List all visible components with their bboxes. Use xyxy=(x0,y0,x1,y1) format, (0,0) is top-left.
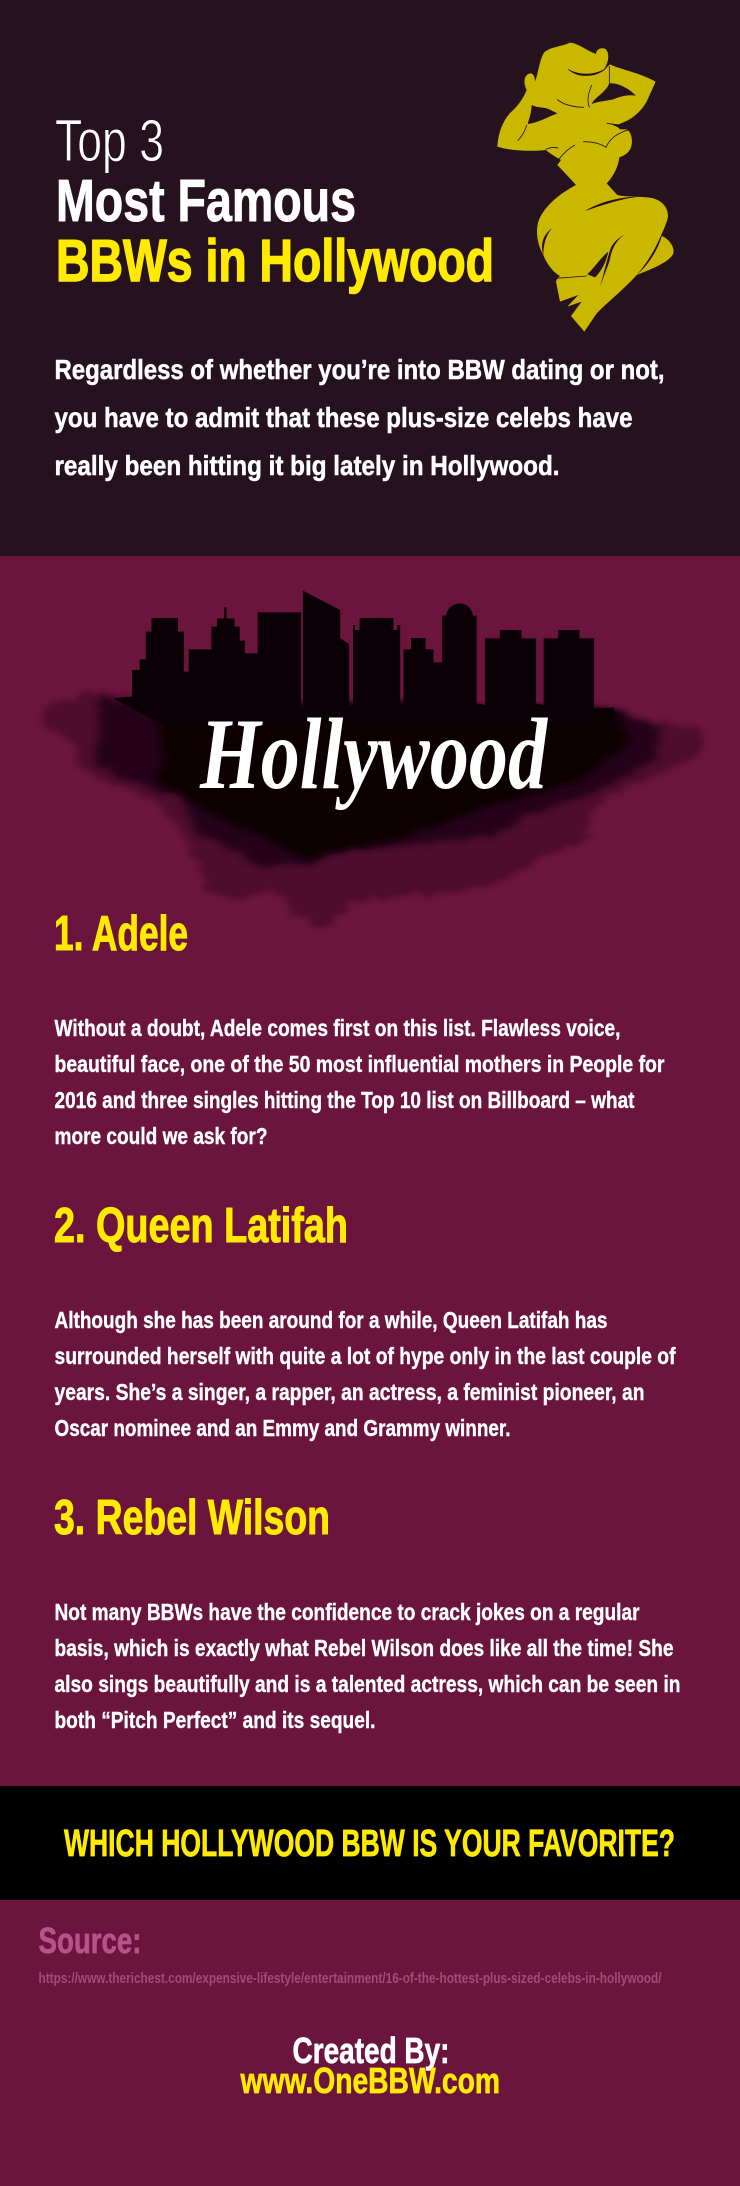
title line: BBWs in Hollywood: BBWs in Hollywood xyxy=(56,228,494,294)
icon: woman silhouette xyxy=(497,43,674,332)
text block: Queen Latifah: Although she has been around for a while, Queen Latifah has xyxy=(54,1307,608,1333)
text block: Rebel Wilson: both “Pitch Perfect” and its sequel. xyxy=(54,1707,376,1733)
title line: Top 3: Top 3 xyxy=(55,108,164,174)
heading: 3. Rebel Wilson: 3. Rebel Wilson xyxy=(54,1491,330,1545)
section: Queen Latifah xyxy=(54,1199,676,1441)
text block: Rebel Wilson xyxy=(54,1599,680,1733)
text block: Queen Latifah xyxy=(54,1307,676,1441)
panel: footer xyxy=(38,1920,662,2101)
title xyxy=(55,108,494,294)
section: Rebel Wilson xyxy=(54,1491,680,1733)
intro paragraph: really been hitting it big lately in Hollywood. xyxy=(54,450,560,481)
text block: Adele: more could we ask for? xyxy=(54,1123,268,1149)
credit: created by: Created By: xyxy=(292,2030,450,2071)
illustration: Hollywood skyline over ink wash xyxy=(42,591,703,932)
text block: Queen Latifah: Oscar nominee and an Emmy and Grammy winner. xyxy=(54,1415,510,1441)
panel: call to action band xyxy=(0,1786,740,1900)
title line: Most Famous: Most Famous xyxy=(56,168,356,234)
section: Adele xyxy=(54,907,664,1149)
panel: main content xyxy=(0,556,740,2186)
intro paragraph xyxy=(54,354,664,481)
text block: Adele xyxy=(54,1015,664,1149)
heading: 1. Adele: 1. Adele xyxy=(54,907,188,961)
credit: website: www.OneBBW.com xyxy=(240,2060,500,2101)
text block: Adele: Without a doubt, Adele comes first on this list. Flawless voice, xyxy=(54,1015,620,1041)
intro paragraph: you have to admit that these plus-size celebs have xyxy=(54,402,632,433)
source label: Source: xyxy=(38,1920,142,1961)
heading: 2. Queen Latifah: 2. Queen Latifah xyxy=(54,1199,348,1253)
intro paragraph: Regardless of whether you’re into BBW dating or not, xyxy=(54,354,664,385)
panel: header xyxy=(0,0,740,556)
brush lettering: Hollywood: Hollywood xyxy=(199,698,549,811)
